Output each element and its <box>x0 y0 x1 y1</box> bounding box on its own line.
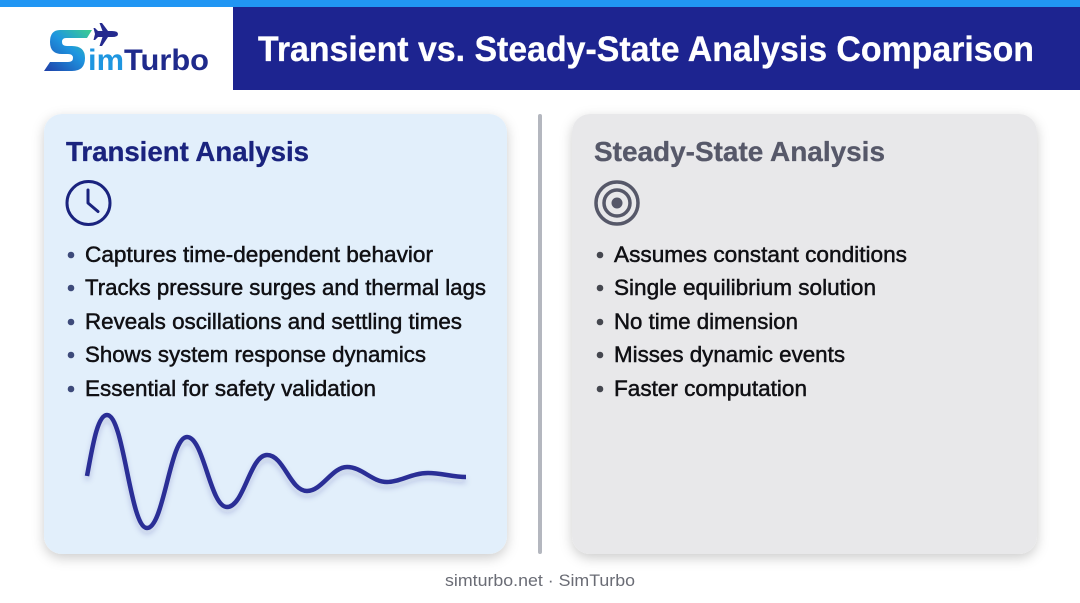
bullet list: transient: Reveals oscillations and settling times <box>85 309 462 334</box>
title banner <box>233 7 1080 90</box>
bullet list: steady-state: Single equilibrium solution <box>614 275 876 300</box>
bullet list: steady-state <box>597 242 907 401</box>
logo <box>44 23 209 77</box>
icon: target <box>596 182 638 224</box>
icon: clock <box>67 182 110 224</box>
panel: transient analysis <box>44 114 507 554</box>
center divider <box>538 114 542 554</box>
heading: transient: Transient Analysis <box>66 136 309 167</box>
bullet list: transient: Essential for safety validation <box>85 376 376 401</box>
heading: steady-state: Steady-State Analysis <box>594 136 885 167</box>
panel: steady-state analysis <box>572 114 1037 554</box>
bullet list: transient: Shows system response dynamics <box>85 342 426 367</box>
bullet list: transient: Tracks pressure surges and thermal lags <box>85 275 486 300</box>
bullet list: steady-state: Assumes constant conditions <box>614 242 907 267</box>
bullet list: steady-state: Misses dynamic events <box>614 342 845 367</box>
logo plane <box>94 23 118 46</box>
top accent bar <box>0 0 1080 7</box>
logo wordmark: imTurbo <box>88 44 209 77</box>
title: Transient vs. Steady-State Analysis Comparison <box>258 30 1034 69</box>
bullet list: steady-state: Faster computation <box>614 376 807 401</box>
chart: damped oscillation wave <box>87 415 466 528</box>
logo S mark <box>44 30 92 71</box>
bullet list: transient <box>68 242 486 401</box>
bullet list: steady-state: No time dimension <box>614 309 798 334</box>
bullet list: transient: Captures time-dependent behavior <box>85 242 434 267</box>
footer: simturbo.net · SimTurbo <box>445 571 635 590</box>
